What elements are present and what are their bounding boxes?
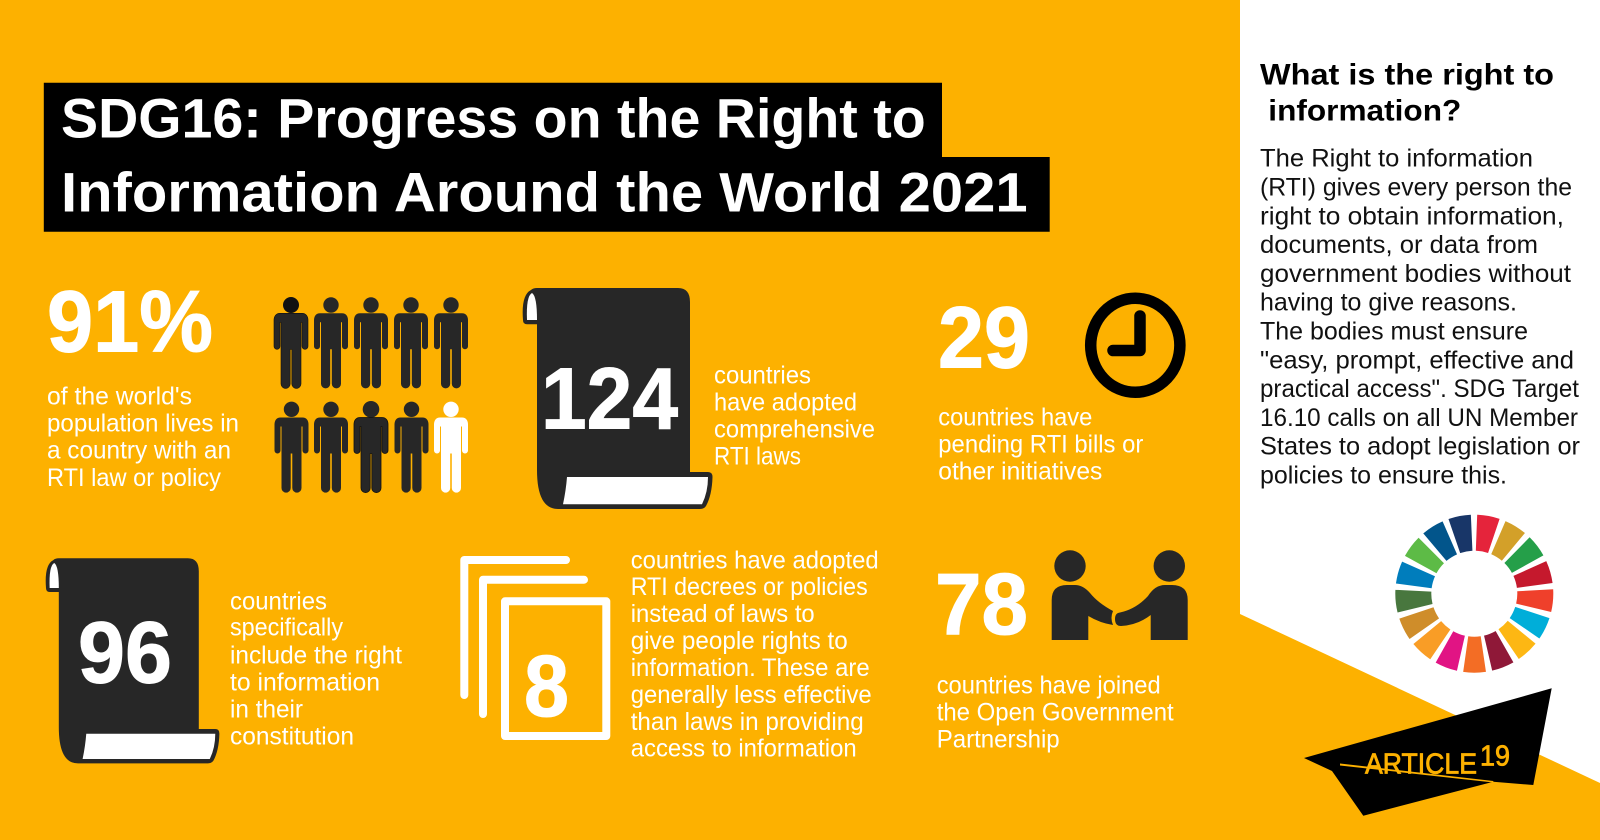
icon: scroll — [46, 558, 219, 763]
icon: SDG colour wheel — [1388, 507, 1561, 680]
icon: clock — [1091, 298, 1180, 392]
text: decrees description: countries have adopted — [631, 546, 879, 574]
panel: 29 pending bills — [938, 289, 1180, 485]
sidebar body text: "easy, prompt, effective and — [1260, 346, 1574, 374]
sidebar body text: documents, or data from — [1260, 231, 1538, 259]
text: population description: RTI law or policy — [47, 464, 221, 492]
logo: ARTICLE 19 — [1304, 688, 1552, 816]
text: bills description: other initiatives — [938, 457, 1102, 485]
logo: ARTICLE 19: 19 — [1480, 741, 1510, 773]
stat: 78: 78 — [935, 556, 1028, 653]
panel: 91 percent population — [47, 274, 468, 493]
text: decrees description: RTI decrees or policies — [631, 573, 868, 601]
text: decrees description — [631, 546, 879, 763]
stat: 91%: 91% — [47, 274, 213, 371]
sidebar body text: right to obtain information, — [1260, 202, 1564, 230]
sidebar heading: What is the right to — [1260, 58, 1554, 91]
sidebar body text: (RTI) gives every person the — [1260, 174, 1572, 202]
text: laws description — [714, 361, 875, 471]
text: constitution description: in their — [230, 696, 303, 724]
text: constitution description: to information — [230, 668, 380, 696]
icon: scroll — [523, 288, 712, 509]
sidebar body text: government bodies without — [1260, 260, 1571, 288]
panel: 96 constitution — [46, 558, 402, 763]
title — [44, 83, 1050, 232]
text: laws description: comprehensive — [714, 415, 875, 443]
stat: 8: 8 — [524, 638, 569, 735]
text: decrees description: instead of laws to — [631, 600, 815, 628]
title: Information Around the World 2021 — [61, 161, 1028, 224]
text: partnership description: countries have joined — [937, 671, 1161, 699]
stat: 124: 124 — [541, 350, 678, 447]
stat: 29: 29 — [938, 289, 1030, 386]
text: partnership description: the Open Government — [937, 698, 1174, 726]
text: constitution description — [230, 587, 402, 750]
text: population description: of the world's — [47, 382, 192, 410]
icon: stacked documents — [464, 560, 606, 736]
sidebar body text — [1260, 145, 1580, 489]
text: population description: population lives in — [47, 409, 239, 437]
icon: handshake — [1052, 550, 1188, 640]
stat: 96: 96 — [78, 605, 172, 702]
panel: white sidebar — [1240, 0, 1600, 783]
sidebar body text: States to adopt legislation or — [1260, 433, 1580, 461]
text: laws description: countries — [714, 361, 811, 389]
sidebar body text: policies to ensure this. — [1260, 462, 1507, 490]
text: population description — [47, 382, 239, 492]
text: decrees description: information. These are — [631, 654, 870, 682]
text: constitution description: include the right — [230, 641, 402, 669]
text: partnership description — [937, 671, 1174, 753]
title: SDG16: Progress on the Right to — [61, 86, 926, 149]
text: partnership description: Partnership — [937, 725, 1060, 753]
text: constitution description: constitution — [230, 722, 354, 750]
logo: ARTICLE 19: ARTICLE — [1365, 748, 1477, 780]
icon: ten people, nine dark one white — [274, 297, 468, 493]
text: population description: a country with an — [47, 436, 231, 464]
panel: 78 open government partnership — [935, 550, 1188, 753]
text: bills description — [938, 404, 1143, 485]
text: decrees description: give people rights to — [631, 627, 848, 655]
text: decrees description: access to information — [631, 735, 857, 763]
sidebar body text: The Right to information — [1260, 145, 1533, 173]
panel: 8 decrees or policies — [464, 546, 879, 763]
text: bills description: pending RTI bills or — [938, 430, 1143, 458]
text: laws description: RTI laws — [714, 443, 801, 471]
sidebar body text: having to give reasons. — [1260, 289, 1517, 317]
panel: 124 comprehensive laws — [523, 288, 875, 509]
sidebar body text: The bodies must ensure — [1260, 318, 1528, 346]
sidebar heading — [1260, 58, 1554, 128]
text: decrees description: than laws in providing — [631, 708, 864, 736]
text: constitution description: specifically — [230, 614, 343, 642]
sidebar heading: information? — [1268, 95, 1461, 128]
text: bills description: countries have — [938, 404, 1092, 432]
sidebar body text: 16.10 calls on all UN Member — [1260, 404, 1578, 432]
text: decrees description: generally less effective — [631, 681, 872, 709]
text: constitution description: countries — [230, 587, 327, 615]
text: laws description: have adopted — [714, 388, 857, 416]
sidebar body text: practical access". SDG Target — [1260, 375, 1579, 403]
